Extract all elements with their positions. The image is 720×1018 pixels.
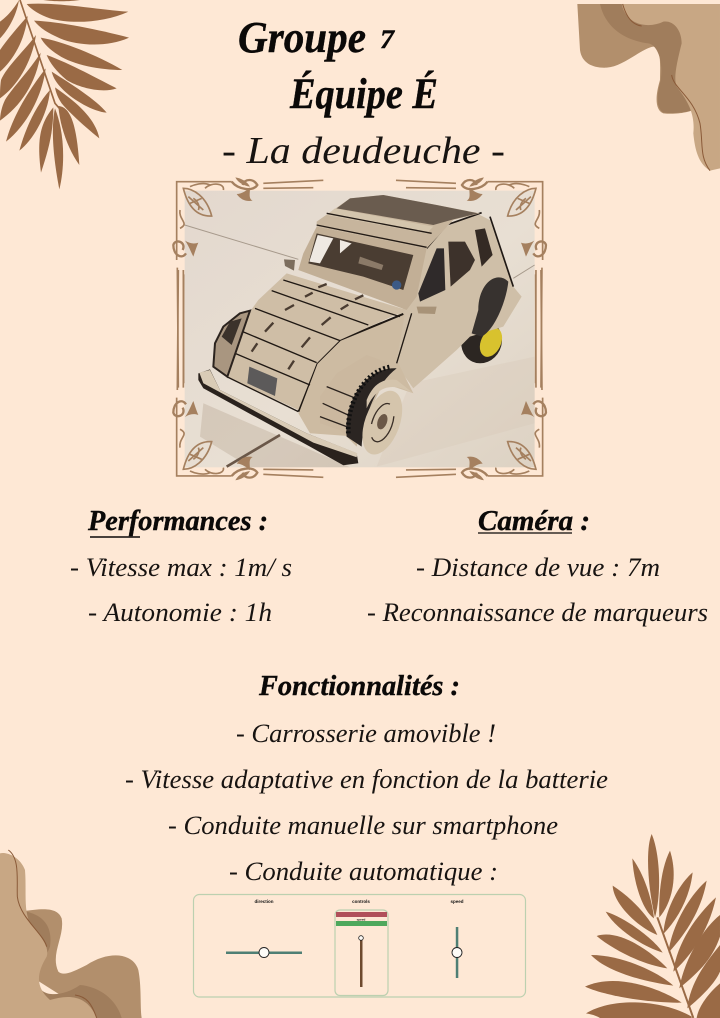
hood xyxy=(227,273,407,410)
text block: fonctionnalites: - Carrosserie amovible ! xyxy=(236,719,496,748)
text block: fonctionnalites: - Conduite manuelle sur smartphone xyxy=(168,811,558,840)
icon: wavy shape bottom left xyxy=(0,850,142,1018)
car side xyxy=(383,213,522,388)
text block: fonctionnalites xyxy=(125,719,608,886)
heading: camera: Caméra : xyxy=(478,505,590,537)
photo: wooden car on floor xyxy=(185,191,535,467)
control panel screenshot xyxy=(194,894,526,997)
speed slider xyxy=(450,899,464,978)
direction slider: direction xyxy=(254,899,274,904)
text block: fonctionnalites: - Conduite automatique : xyxy=(229,857,498,886)
title: Équipe É xyxy=(289,71,438,118)
frame ornaments xyxy=(173,177,546,480)
text block: camera: - Reconnaissance de marqueurs xyxy=(367,598,708,627)
photo with ornamental frame xyxy=(173,177,546,480)
left wheel arch xyxy=(213,311,250,377)
text block: fonctionnalites: - Vitesse adaptative en fonction de la batterie xyxy=(125,765,608,794)
heading: fonctionnalites: Fonctionnalités : xyxy=(258,670,460,702)
text block: performances: - Vitesse max : 1m/ s xyxy=(70,553,292,582)
subtitle: - La deudeuche - xyxy=(222,130,505,172)
text block: performances: - Autonomie : 1h xyxy=(88,598,272,627)
direction slider xyxy=(226,899,302,958)
icon: wavy shape top right xyxy=(577,4,720,171)
icon: palm leaf bottom right xyxy=(585,834,720,1018)
front fender xyxy=(298,313,413,437)
front wheel xyxy=(320,355,390,447)
text block: performances xyxy=(70,553,292,627)
speed slider: speed xyxy=(450,899,464,904)
rear wheel xyxy=(454,313,509,370)
title: 7 xyxy=(380,25,395,54)
controls card: controls xyxy=(352,899,370,904)
grille xyxy=(247,367,277,396)
text block: camera xyxy=(367,553,708,627)
title: Groupe xyxy=(238,13,366,62)
heading: performances: Performances : xyxy=(87,505,268,537)
windshield frame xyxy=(298,227,427,310)
text block: camera: - Distance de vue : 7m xyxy=(416,553,660,582)
controls card: speed xyxy=(357,918,366,922)
icon: palm leaf top left xyxy=(0,0,129,189)
controls card xyxy=(335,899,388,996)
title xyxy=(238,13,438,118)
bumper xyxy=(198,369,358,465)
roof xyxy=(317,195,480,248)
mirror xyxy=(284,259,295,271)
